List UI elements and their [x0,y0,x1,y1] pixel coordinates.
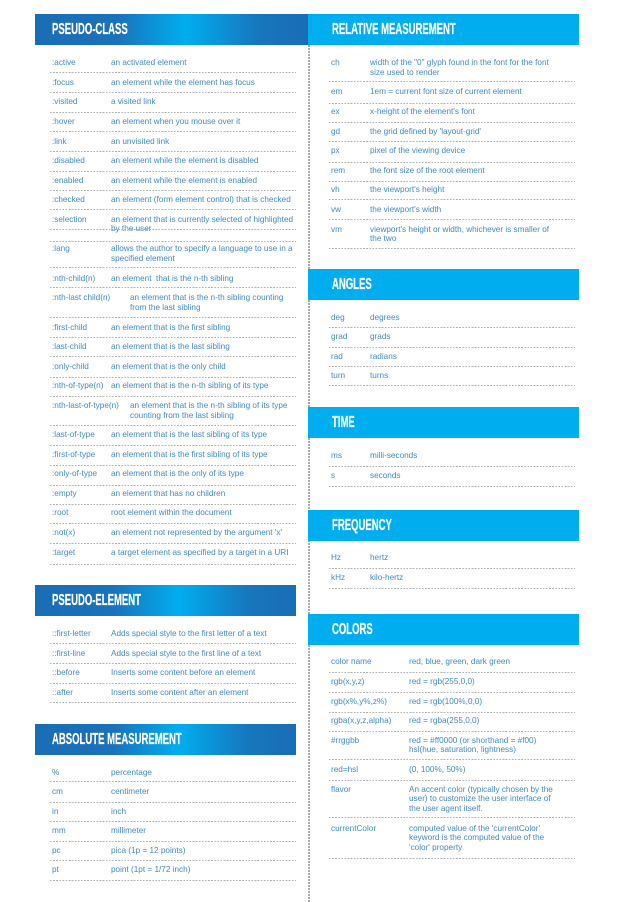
heading: angles: ANGLES [332,276,372,293]
heading: absolute measurement: ABSOLUTE MEASUREMENT [52,731,182,748]
row: percent: percentage [111,768,152,776]
row: disabled [50,155,296,172]
row: checked [50,194,296,210]
row: after [50,687,296,703]
row: px [329,146,575,163]
row: before [50,668,296,684]
row: first-letter [50,629,296,644]
row: cm [50,786,296,803]
row: last-of-type: :last-of-type [52,430,95,439]
row: first-child: an element that is the first sibling [111,322,230,332]
row: empty: :empty [52,489,77,498]
row: pc [50,845,296,861]
row: rgb percent [329,696,575,713]
row: rgba: rgba(x,y,z,alpha) [331,716,391,725]
row: em: em [331,87,342,96]
panel: relative measurement [308,14,579,249]
row: currentColor: computed value of the 'currentColor' [409,824,540,832]
row: lang: allows the author to specify a language to use in a [111,244,293,253]
row: red=hsl: (0, 100%, 50%) [409,765,465,774]
heading: pseudo-class: PSEUDO-CLASS [52,21,128,38]
row: deg: degrees [370,312,400,322]
row: selection: by the user [111,224,152,233]
row: flavor: flavor [331,784,351,794]
row: selection [50,214,296,242]
row: first-letter: ::first-letter [52,629,91,638]
row: kHz: kilo-hertz [370,572,403,582]
row: nth-last-of-type: counting from the last sibling [130,411,234,420]
row: hex: #rrggbb [331,736,359,744]
row: after: Inserts some content after an element [111,688,248,697]
row: checked: an element (form element control) that is checked [111,195,291,204]
row: flavor: user) to customize the user interface of [409,794,551,803]
row: flavor: the user agent itself. [409,804,483,813]
row: visited: a visited link [111,97,156,106]
row: vh [329,185,575,200]
row: in: inch [111,806,126,816]
row: lang: :lang [52,244,70,253]
row: ex: ex [331,107,340,116]
row: nth-child: :nth-child(n) [52,274,95,282]
row: deg: deg [331,312,345,322]
row: nth-last child: an element that is the n-th sibling counting [130,293,283,302]
row: pc: pica (1p = 12 points) [111,846,185,854]
row: root: :root [52,508,68,517]
row: last-child: an element that is the last sibling [111,342,230,351]
row: only-child: an element that is the only child [111,362,226,370]
panel: time [308,407,579,487]
row: vh: the viewport's height [370,185,444,194]
row: kHz: kHz [331,572,345,582]
row: target: :target [52,548,75,556]
row: first-child [50,322,296,338]
heading: colors [308,614,579,644]
row: turn [329,371,575,386]
row: color name: color name [331,657,372,666]
row: after: ::after [52,688,73,697]
row: vw: vw [331,205,341,214]
row: vm: viewport's height or width, whichever is smaller of [370,224,549,234]
row: selection: an element that is currently selected of highlighted [111,214,293,224]
row: disabled: an element while the element is disabled [111,156,258,165]
row: rad [329,351,575,367]
row: rgb percent: rgb(x%,y%,z%) [331,696,387,706]
row: rgba [329,715,575,732]
row: visited [50,97,296,113]
row: nth-of-type: :nth-of-type(n) [52,381,103,390]
heading: time: TIME [332,414,355,431]
row: not: an element not represented by the argument 'x' [111,528,282,537]
row: only-of-type: an element that is the only of its type [111,469,244,478]
row: target [50,547,296,565]
row: empty [50,488,296,505]
row: pt: point (1pt = 1/72 inch) [111,865,190,874]
row: percent [50,767,296,782]
row: before: Inserts some content before an element [111,668,255,677]
heading: absolute measurement [35,724,296,754]
row: pt: pt [52,865,59,874]
row: only-child: :only-child [52,362,89,370]
heading: frequency [308,510,579,540]
panel: frequency [308,510,579,589]
row: first-line: ::first-line [52,649,85,658]
row: vh: vh [331,185,340,194]
row: cm: centimeter [111,787,149,796]
row: currentColor: currentColor [331,824,376,832]
row: before: ::before [52,668,80,677]
heading: pseudo-class [35,14,308,44]
row: em: 1em = current font size of current element [370,87,522,96]
row: px: pixel of the viewing device [370,146,465,155]
heading: frequency: FREQUENCY [332,517,392,534]
row: focus [50,77,296,93]
row: root [50,508,296,524]
row: nth-last child: from the last sibling [130,303,201,312]
row: grad: grads [370,332,390,341]
row: enabled: :enabled [52,176,83,184]
row: nth-child [50,273,296,288]
row: last-child: :last-child [52,342,87,351]
row: rgb percent: red = rgb(100%,0,0) [409,696,482,706]
row: rem: the font size of the root element [370,166,485,174]
row: enabled: an element while the element is enabled [111,176,257,184]
row: flavor: An accent color (typically chosen by the [409,784,553,794]
row: link [50,136,296,152]
heading: angles [308,269,579,300]
row: pt [50,865,296,881]
row: gd: the grid defined by 'layout-grid' [370,126,481,136]
row: ms [329,450,575,467]
row: active [50,58,296,73]
row: checked: :checked [52,195,85,204]
row: hover: an element when you mouse over it [111,117,240,126]
row: vw: the viewport's width [370,205,441,214]
row: hex: hsl(hue, saturation, lightness) [409,745,516,754]
panel: pseudo-element [35,585,296,703]
row: first-of-type [50,449,296,466]
heading: colors: COLORS [332,621,373,638]
row: ex: x-height of the element's font [370,107,475,116]
row: Hz: hertz [370,553,388,562]
row: focus: :focus [52,78,74,86]
row: rgba: red = rgba(255,0,0) [409,716,479,725]
row: pc: pc [52,846,61,854]
row: grad [329,332,575,348]
row: mm: mm [52,826,66,835]
row: currentColor [329,823,575,859]
row: selection: :selection [52,214,87,224]
row: disabled: :disabled [52,156,85,165]
heading: pseudo-element: PSEUDO-ELEMENT [52,592,141,609]
row: deg [329,312,575,328]
row: only-of-type: :only-of-type [52,469,97,478]
row: rad: radians [370,352,397,360]
row: hex: red = #ff0000 (or shorthand = #f00) [409,736,536,744]
row: ch [329,57,575,82]
row: rgb [329,676,575,693]
row: nth-of-type [50,381,296,397]
row: empty: an element that has no children [111,489,225,498]
heading: relative measurement [308,14,579,44]
row: rgb: rgb(x,y,z) [331,677,365,686]
row: s [329,470,575,487]
row: color name: red, blue, green, dark green [409,657,510,666]
row: nth-last child: :nth-last child(n) [52,293,110,302]
vertical dotted divider [308,45,310,902]
row: active: :active [52,58,76,67]
row: link: :link [52,136,67,146]
row: s: seconds [370,470,400,480]
row: last-of-type: an element that is the last sibling of its type [111,430,267,439]
row: in [50,806,296,822]
row: color name [329,657,575,673]
row: s: s [331,470,335,480]
row: first-of-type: :first-of-type [52,450,95,458]
row: nth-last-of-type [50,400,296,426]
row: kHz [329,572,575,589]
row: ch: size used to render [370,68,440,77]
row: Hz [329,552,575,569]
row: enabled [50,175,296,191]
row: vm: vm [331,224,342,234]
row: first-child: :first-child [52,322,87,332]
row: ch: ch [331,58,340,67]
row: rem [329,165,575,182]
row: first-line [50,648,296,664]
row: vw [329,204,575,220]
row: ms: ms [331,451,342,460]
row: rgb: red = rgb(255,0,0) [409,677,475,686]
row: grad: grad [331,332,347,341]
row: turn: turn [331,371,345,380]
row: currentColor: 'color' property [409,843,462,852]
row: first-of-type: an element that is the first sibling of its type [111,450,268,458]
heading: time [308,407,579,438]
row: rem: rem [331,166,345,174]
row: flavor [329,784,575,818]
row: nth-last child [50,292,296,318]
row: currentColor: keyword is the computed value of the [409,833,544,842]
row: hex [329,735,575,760]
row: mm [50,825,296,842]
row: visited: :visited [52,97,77,106]
row: first-line: Adds special style to the first line of a text [111,649,261,658]
row: ch: width of the "0" glyph found in the font for the font [370,58,549,67]
heading: relative measurement: RELATIVE MEASUREMENT [332,21,456,38]
row: first-letter: Adds special style to the first letter of a text [111,629,267,638]
row: only-child [50,361,296,378]
row: red=hsl [329,764,575,781]
row: rad: rad [331,352,343,360]
row: red=hsl: red=hsl [331,765,358,774]
row: percent: % [52,768,59,776]
row: cm: cm [52,787,63,796]
row: vm [329,224,575,249]
row: lang: specified element [111,254,175,263]
row: vm: the two [370,234,396,243]
row: target: a target element as specified by a target in a URI [111,548,288,556]
row: turn: turns [370,371,388,380]
row: focus: an element while the element has focus [111,78,255,86]
panel: angles [308,269,579,386]
heading: pseudo-element [35,585,296,616]
row: px: px [331,146,340,155]
row: not [50,527,296,544]
row: ms: milli-seconds [370,451,417,460]
row: hover [50,116,296,132]
row: nth-child: an element that is the n-th sibling [111,274,233,282]
row: not: :not(x) [52,528,75,537]
row: gd: gd [331,126,340,136]
panel: absolute measurement [35,724,296,881]
row: em [329,87,575,104]
row: nth-last-of-type: an element that is the n-th sibling of its type [130,401,287,410]
row: in: in [52,806,58,816]
row: nth-of-type: an element that is the n-th sibling of its type [111,381,268,390]
row: active: an activated element [111,58,187,67]
panel: colors [308,614,579,859]
row: last-child [50,341,296,357]
row: mm: millimeter [111,826,146,835]
row: ex [329,106,575,123]
row: nth-last-of-type: :nth-last-of-type(n) [52,401,119,410]
row: lang [50,244,296,268]
row: gd [329,126,575,142]
row: last-of-type [50,430,296,446]
panel: pseudo-class [35,14,308,565]
row: link: an unvisited link [111,136,169,146]
row: hover: :hover [52,117,75,126]
row: root: root element within the document [111,508,232,517]
row: only-of-type [50,469,296,486]
row: Hz: Hz [331,553,341,562]
